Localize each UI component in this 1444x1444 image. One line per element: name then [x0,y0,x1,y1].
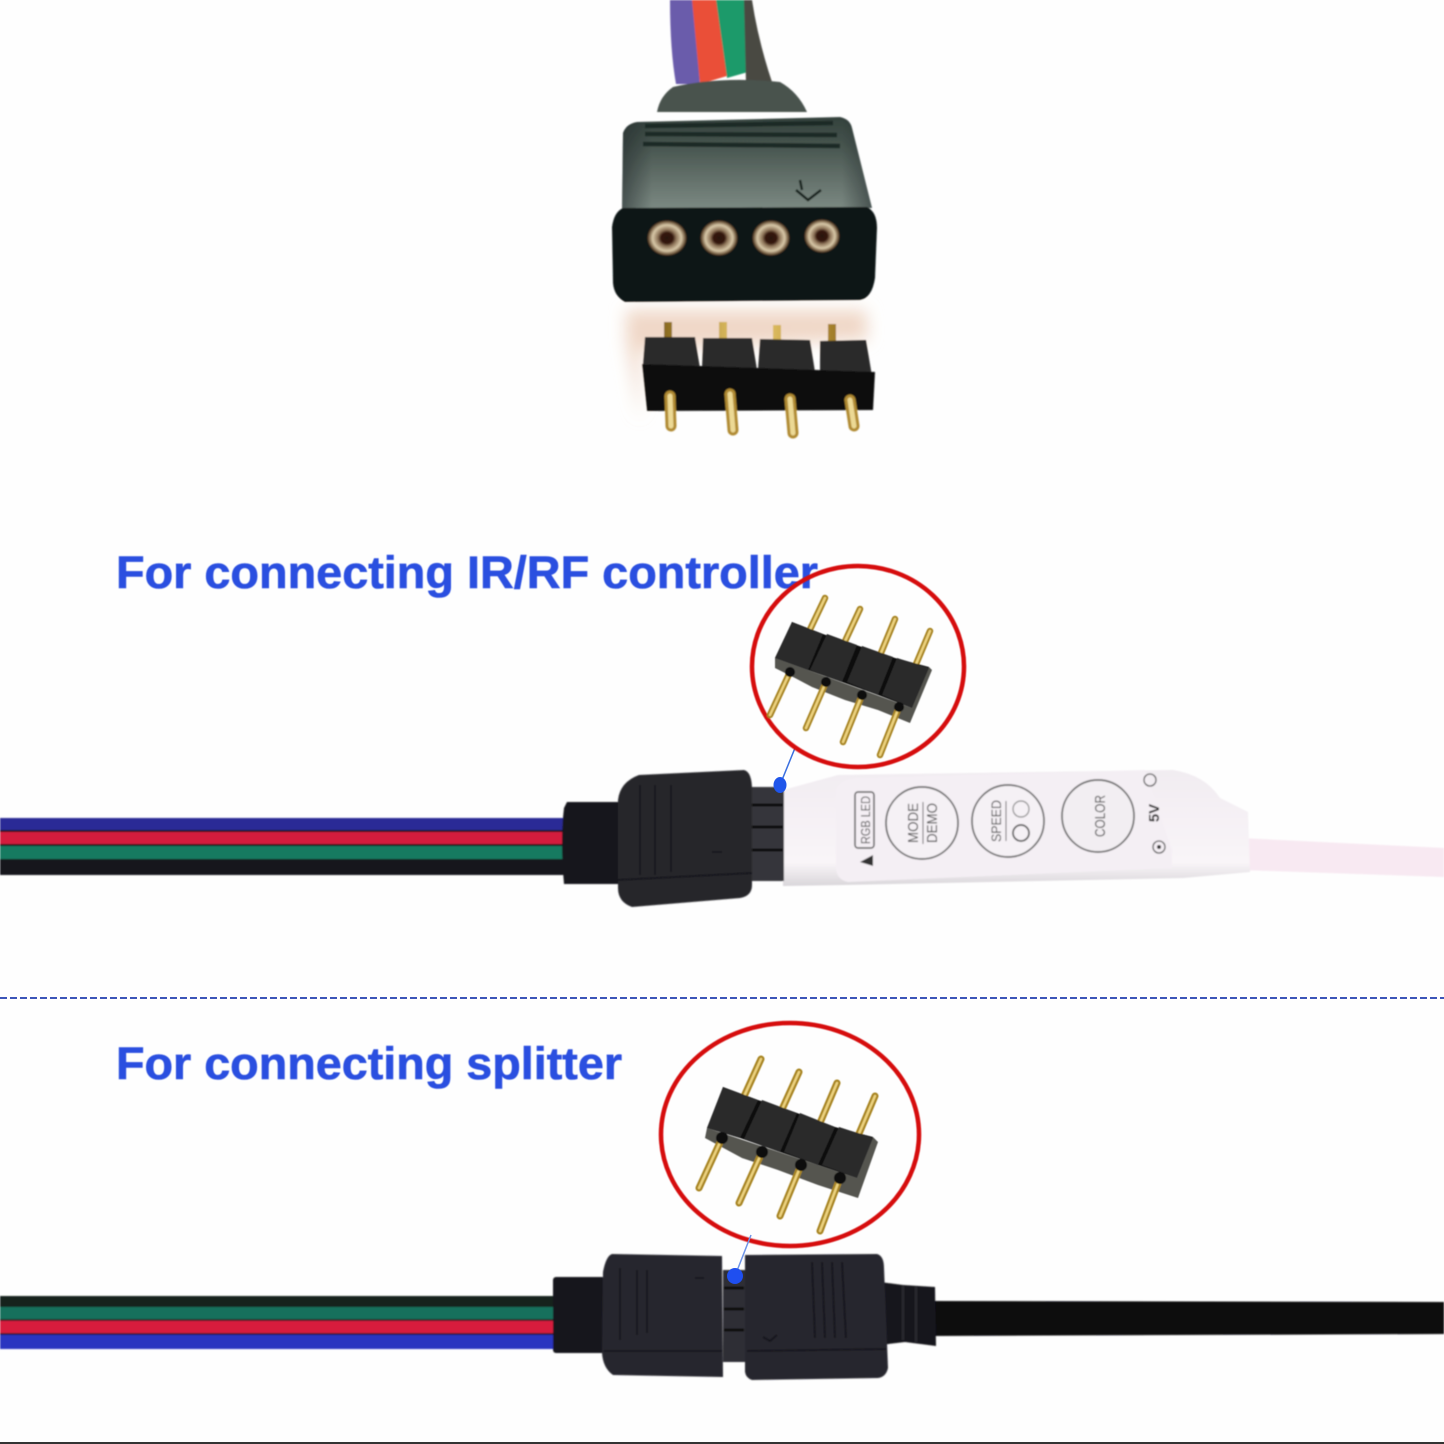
dashed divider [0,997,1444,999]
photo: connector joined to IR/RF controller [0,770,1444,907]
polarity marks [1144,774,1156,786]
strain relief neck [657,80,807,112]
upper pins [805,598,930,676]
pin header [642,322,875,433]
pin segments [748,787,784,881]
strain relief [880,1282,936,1346]
bottom edge line [0,1442,1444,1444]
photo: RGB female connector with pin header [612,0,877,433]
connector front face with sockets [612,207,877,302]
plastic blocks [775,622,823,670]
button: mode demo [886,787,958,859]
button: mode demo: MODE [905,803,922,843]
plastic base band [775,658,932,723]
white output cable [1240,838,1444,877]
button: speed: SPEED [988,800,1004,842]
left connector [553,1254,723,1377]
pin segments [723,1270,745,1362]
callout circle: pin header for controller [752,566,964,767]
right connector [745,1254,888,1380]
controller body [783,770,1250,886]
photo: two connectors joined to black cable [0,1254,1444,1380]
connector top shell [622,117,872,210]
callout dot and leader: controller [774,748,795,793]
black cable [930,1301,1444,1336]
ribbon wires [670,0,772,84]
label: RGB LED [855,792,874,848]
ribbon cable [0,1296,556,1349]
black connector [562,770,752,907]
lower pins [770,672,899,755]
callout dot and leader: splitter [727,1235,751,1284]
callout circle: pin header for splitter [661,1023,919,1246]
cast shadow [626,310,868,420]
warning triangle [860,855,873,866]
lower pins [699,1138,840,1231]
button: color [1062,780,1134,852]
button: mode demo: DEMO [924,803,941,843]
heading: splitter: For connecting splitter [116,1038,622,1089]
label: 5V: 5V [1146,804,1163,822]
button: color: COLOR [1092,795,1109,837]
label: RGB LED: RGB LED [858,796,873,844]
plastic blocks [707,1087,758,1138]
upper pins [741,1059,875,1143]
ribbon cable [0,818,566,875]
button: speed [972,785,1044,857]
heading: IR/RF controller: For connecting IR/RF controller [116,547,818,598]
plastic base band [705,1128,878,1198]
arrow mark [796,180,821,200]
